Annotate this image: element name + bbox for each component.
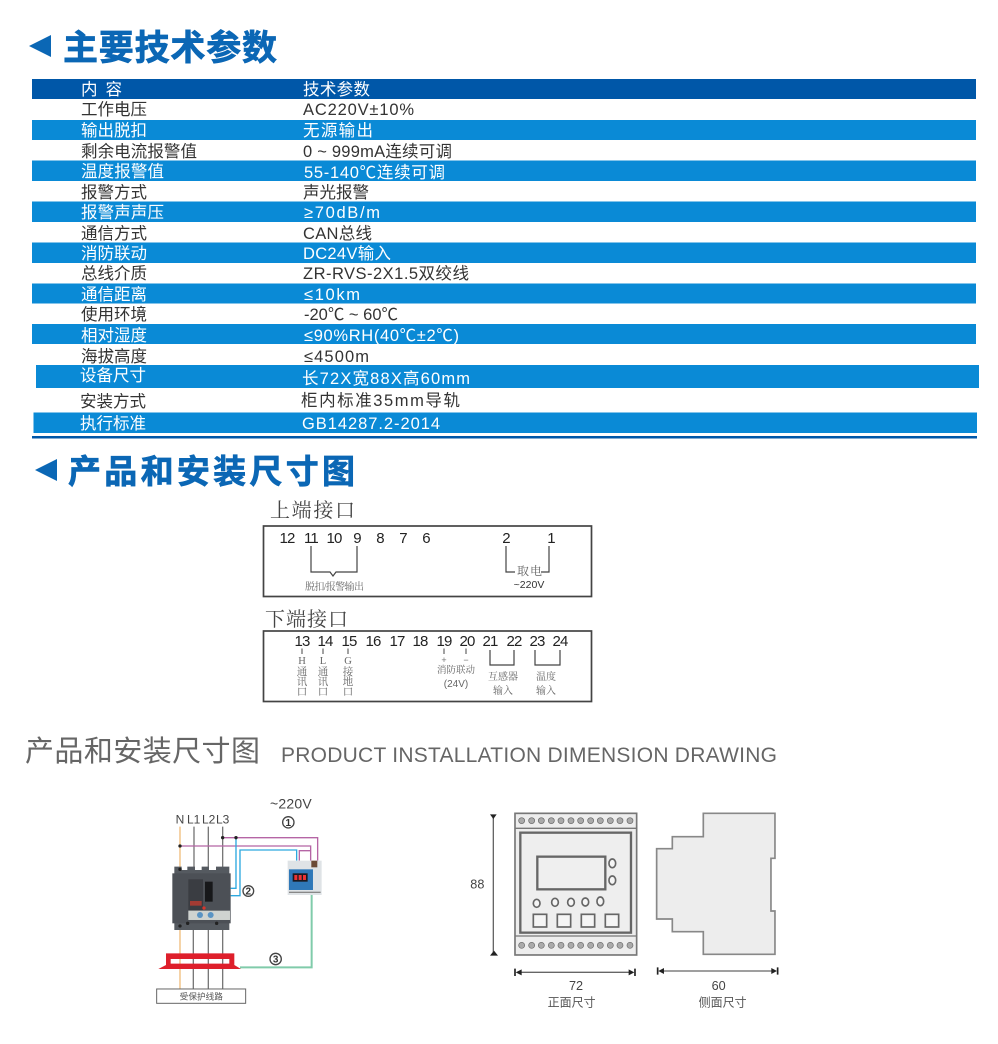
row: fire linkage: 消防联动 bbox=[81, 244, 147, 263]
row: installation: 安装方式 bbox=[80, 392, 146, 411]
lower terminal numbers: 15 bbox=[341, 633, 357, 650]
row: installation: 柜内标准35mm导轨 bbox=[301, 391, 460, 410]
lower terminal numbers: 21 bbox=[482, 633, 498, 650]
H communication label: 口 bbox=[297, 687, 307, 698]
front view bbox=[515, 813, 637, 955]
row: standard: 执行标准 bbox=[80, 414, 146, 433]
dimension 72: 72 bbox=[569, 979, 583, 993]
row: working voltage: 工作电压 bbox=[81, 100, 147, 119]
row: alarm sound pressure: ≥70dB/m bbox=[304, 204, 380, 222]
row: alarm mode: 声光报警 bbox=[303, 183, 369, 202]
lower terminal numbers: 14 bbox=[317, 633, 333, 650]
heading: main technical parameters: 主要技术参数 bbox=[63, 29, 277, 68]
callout 1: 1 bbox=[286, 818, 292, 829]
row: output trip bbox=[32, 120, 976, 140]
G ground label bbox=[343, 648, 354, 698]
circuit breaker bbox=[172, 867, 231, 930]
row: relative humidity: 相对湿度 bbox=[81, 326, 147, 345]
transformer input bracket: 输入 bbox=[493, 684, 513, 697]
fire linkage label: (24V) bbox=[444, 679, 468, 690]
callout 3 bbox=[270, 953, 281, 966]
row: communication mode: CAN总线 bbox=[303, 224, 372, 243]
table: technical parameters bbox=[32, 79, 979, 438]
lower terminals title: 下端接口 bbox=[265, 608, 348, 631]
row: residual current alarm bbox=[81, 142, 452, 161]
L communication label: 讯 bbox=[318, 675, 329, 688]
row: working voltage bbox=[81, 100, 414, 119]
row: bus medium: ZR-RVS-2X1.5双绞线 bbox=[303, 264, 469, 283]
lower terminal numbers: 19 bbox=[436, 633, 452, 650]
upper terminals title: 上端接口 bbox=[270, 499, 355, 522]
trip and alarm output bracket bbox=[305, 546, 364, 593]
G ground label: G bbox=[344, 656, 352, 667]
callout 1 bbox=[283, 817, 294, 829]
panel: upper terminals bbox=[264, 499, 592, 596]
temperature input bracket: 输入 bbox=[536, 684, 556, 697]
green sensor wire bbox=[240, 895, 312, 967]
heading: product installation dimension drawing: PRODUCT INSTALLATION DIMENSION DRAWING bbox=[281, 744, 777, 767]
callout 2: 2 bbox=[246, 887, 252, 898]
lower terminal numbers: 17 bbox=[389, 633, 405, 650]
phase conductors bbox=[180, 827, 223, 989]
row: altitude bbox=[81, 347, 369, 366]
row: residual current alarm: 剩余电流报警值 bbox=[81, 142, 197, 161]
power wires bbox=[180, 838, 318, 861]
upper terminal numbers: 6 bbox=[422, 530, 430, 547]
H communication label bbox=[297, 648, 308, 698]
trip and alarm output bracket: 脱扣/报警输出 bbox=[305, 580, 364, 593]
row: standard: GB14287.2-2014 bbox=[302, 415, 440, 433]
dimension 88 bbox=[470, 814, 498, 956]
heading: product installation dimension drawing bbox=[25, 735, 777, 768]
table header row: 技术参数 bbox=[303, 80, 370, 99]
row: operating environment: 使用环境 bbox=[81, 305, 147, 324]
row: altitude: ≤4500m bbox=[304, 348, 369, 366]
upper terminals box bbox=[264, 526, 592, 596]
G ground label: 地 bbox=[343, 675, 354, 688]
lower terminal numbers bbox=[294, 633, 568, 650]
upper terminal numbers: 8 bbox=[376, 530, 384, 547]
dimension 72 bbox=[515, 969, 635, 1010]
wiring diagram bbox=[157, 795, 322, 1003]
row: temperature alarm: 温度报警值 bbox=[81, 162, 164, 181]
lower terminal numbers: 20 bbox=[459, 633, 475, 650]
dimension 72: 正面尺寸 bbox=[548, 996, 596, 1010]
fire linkage label: + bbox=[441, 655, 447, 665]
row: relative humidity bbox=[32, 324, 976, 345]
dimension 60: 60 bbox=[712, 979, 726, 993]
fire linkage label: 消防联动 bbox=[437, 664, 475, 676]
row: communication mode: 通信方式 bbox=[81, 224, 147, 243]
heading: product and installation dimensions: 产品和安装尺寸图 bbox=[68, 453, 355, 490]
upper terminal numbers: 7 bbox=[399, 530, 407, 547]
row: operating environment bbox=[81, 305, 398, 324]
row: fire linkage: DC24V输入 bbox=[303, 244, 391, 263]
row: communication distance: ≤10km bbox=[304, 286, 360, 304]
row: alarm sound pressure bbox=[32, 202, 976, 222]
upper terminal numbers: 2 bbox=[502, 530, 510, 547]
protected line box bbox=[157, 989, 246, 1003]
row: communication mode bbox=[81, 224, 372, 243]
phase labels: L1 bbox=[187, 812, 201, 826]
top terminal screws bbox=[519, 818, 633, 824]
lower terminal numbers: 22 bbox=[506, 633, 522, 650]
lower terminal numbers: 16 bbox=[365, 633, 381, 650]
row: alarm sound pressure: 报警声声压 bbox=[81, 203, 164, 222]
row: device size bbox=[36, 365, 979, 388]
upper terminal numbers bbox=[279, 530, 555, 547]
H communication label: H bbox=[298, 656, 306, 667]
lower terminal numbers: 18 bbox=[412, 633, 428, 650]
dimension drawings bbox=[470, 813, 778, 1010]
row: operating environment: -20℃ ~ 60℃ bbox=[304, 306, 398, 324]
lower terminal numbers: 23 bbox=[529, 633, 545, 650]
row: communication distance bbox=[32, 284, 976, 304]
row: alarm mode: 报警方式 bbox=[81, 183, 147, 202]
row: device size: 长72X宽88X高60mm bbox=[302, 369, 470, 388]
upper terminal numbers: 11 bbox=[304, 530, 318, 547]
L communication label: L bbox=[320, 656, 326, 667]
power supply bracket: ~220V bbox=[514, 579, 544, 591]
phase labels: L3 bbox=[216, 812, 230, 826]
bottom terminal screws bbox=[519, 942, 633, 948]
temperature input bracket: 温度 bbox=[536, 670, 556, 683]
dimension 88: 88 bbox=[470, 877, 484, 891]
row: temperature alarm bbox=[32, 160, 976, 182]
row: communication distance: 通信距离 bbox=[81, 285, 147, 304]
row: altitude: 海拔高度 bbox=[81, 347, 147, 366]
residual current monitor device bbox=[288, 861, 322, 895]
row: output trip: 输出脱扣 bbox=[81, 121, 147, 140]
row: fire linkage bbox=[32, 242, 976, 263]
G ground label: 接 bbox=[343, 665, 354, 678]
H communication label: 讯 bbox=[297, 675, 308, 688]
row: relative humidity: ≤90%RH(40℃±2℃) bbox=[304, 327, 459, 345]
phase labels: L2 bbox=[202, 812, 216, 826]
panel: lower terminals bbox=[264, 608, 592, 702]
L communication label: 通 bbox=[318, 666, 329, 678]
lower terminal numbers: 13 bbox=[294, 633, 310, 650]
row: alarm mode bbox=[81, 183, 369, 202]
upper terminal numbers: 1 bbox=[547, 530, 555, 547]
row: standard bbox=[34, 412, 977, 433]
display window bbox=[537, 857, 605, 889]
junction dots bbox=[178, 836, 238, 848]
row: installation bbox=[80, 391, 460, 411]
dimension 60 bbox=[658, 967, 778, 1010]
phase labels: N bbox=[176, 812, 184, 826]
row: bus medium: 总线介质 bbox=[81, 264, 147, 283]
H communication label: 通 bbox=[297, 666, 308, 678]
phase labels bbox=[176, 812, 230, 826]
temperature input bracket bbox=[535, 650, 560, 697]
lower terminal numbers: 24 bbox=[552, 633, 568, 650]
heading: product installation dimension drawing: 产品和安装尺寸图 bbox=[25, 735, 260, 768]
table header row bbox=[32, 79, 976, 99]
upper terminal numbers: 9 bbox=[353, 530, 361, 547]
transformer input bracket bbox=[488, 650, 518, 697]
row: temperature alarm: 55-140℃连续可调 bbox=[304, 163, 445, 182]
L communication label: 口 bbox=[318, 687, 328, 698]
dimension 60: 侧面尺寸 bbox=[699, 996, 747, 1010]
upper terminal numbers: 12 bbox=[279, 530, 295, 547]
table header row: 内 容 bbox=[81, 80, 122, 99]
row: output trip: 无源输出 bbox=[303, 121, 373, 140]
upper terminal numbers: 10 bbox=[326, 530, 342, 547]
supply voltage label: ~220V bbox=[270, 795, 312, 811]
fire linkage label: − bbox=[463, 655, 469, 665]
power supply bracket bbox=[506, 546, 549, 591]
fire linkage label bbox=[437, 648, 475, 690]
red current transformer bbox=[158, 953, 241, 969]
callout 2 bbox=[243, 886, 254, 898]
callout 3: 3 bbox=[273, 955, 279, 966]
row: bus medium bbox=[81, 264, 469, 283]
transformer input bracket: 互感器 bbox=[488, 670, 518, 683]
row: residual current alarm: 0 ~ 999mA连续可调 bbox=[303, 142, 452, 161]
indicator lights and buttons bbox=[533, 859, 619, 927]
G ground label: 口 bbox=[343, 687, 353, 698]
L communication label bbox=[318, 648, 329, 698]
side view bbox=[657, 813, 775, 954]
row: working voltage: AC220V±10% bbox=[303, 101, 414, 119]
signal wires bbox=[231, 838, 297, 896]
row: device size: 设备尺寸 bbox=[80, 366, 146, 385]
power supply bracket: 取电 bbox=[517, 563, 542, 578]
lower terminals box bbox=[264, 631, 592, 702]
protected line box: 受保护线路 bbox=[180, 990, 223, 1001]
